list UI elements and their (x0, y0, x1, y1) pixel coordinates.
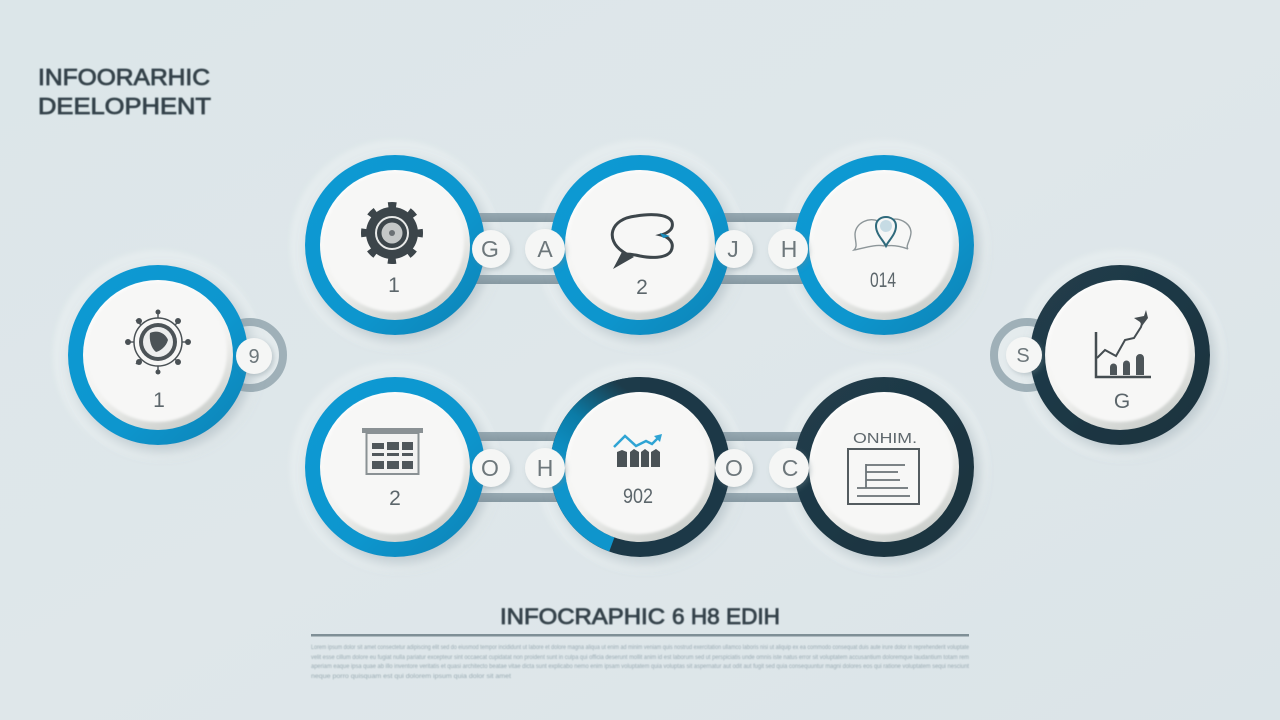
icon: bars with trend line (614, 434, 662, 467)
label: 2 (636, 276, 648, 299)
node: top 2 speech bubble (550, 155, 730, 335)
badge: H (525, 448, 565, 488)
footer heading: INFOCRAPHIC (500, 604, 665, 629)
connector: left ring (217, 322, 283, 388)
label: 2 (389, 487, 401, 510)
connector: bottom row left (475, 432, 565, 502)
footer body text: aperiam eaque ipsa quae ab illo inventore veritatis et quasi architecto beatae vitae dicta sunt explicabo nemo enim ipsam voluptatem quia voluptas sit aspernatur aut odit aut fugit sed quia consequuntur magni dolores eos qui ratione voluptatem sequi nesciunt (311, 663, 969, 670)
footer heading: 6 H8 EDIH (672, 604, 780, 629)
connector: bottom row right (720, 432, 805, 502)
icon: calendar (362, 428, 423, 474)
node: bottom 2 bar chart (550, 377, 730, 557)
badge: O: O (725, 455, 743, 481)
connector: right ring (994, 322, 1060, 388)
node: bottom 3 report (794, 377, 974, 557)
node: far left globe (68, 265, 248, 445)
footer body text (311, 644, 969, 680)
footer body text: velit esse cillum dolore eu fugiat nulla pariatur excepteur sint occaecat cupidatat non proident sunt in culpa qui officia deserunt mollit anim id est laborum sed ut perspiciatis unde omnis iste natus error sit voluptatem accusantium doloremque laudantium totam rem (311, 654, 969, 661)
label: 902 (623, 485, 653, 508)
badge: H: H (781, 236, 797, 262)
connector: top row right (720, 213, 805, 284)
connector: top row left (475, 213, 565, 284)
badge: H: H (537, 455, 553, 481)
title: INFOORARHIC (38, 64, 210, 90)
badge: H (768, 229, 808, 269)
icon: report window (848, 430, 919, 504)
footer heading (500, 604, 780, 629)
label: 014 (870, 269, 896, 292)
node: bottom 1 calendar (305, 377, 485, 557)
badge: J (715, 230, 753, 268)
icon: overlapping bubbles with pin (854, 217, 911, 250)
label: 1 (153, 389, 165, 412)
badge: C (769, 448, 809, 488)
node: top 3 hearts (794, 155, 974, 335)
badge: S: S (1016, 345, 1030, 367)
footer rule (311, 634, 969, 636)
badge: G: G (481, 236, 499, 262)
badge: O (472, 449, 510, 487)
footer body text: Lorem ipsum dolor sit amet consectetur adipiscing elit sed do eiusmod tempor incididunt ut labore et dolore magna aliqua ut enim ad minim veniam quis nostrud exercitation ullamco laboris nisi ut aliquip ex ea commodo consequat duis aute irure dolor in reprehenderit voluptate (311, 644, 969, 651)
icon: globe wheel (125, 310, 191, 374)
node: top 1 gear (305, 155, 485, 335)
badge: 9: 9 (248, 346, 260, 368)
badge: C: C (782, 455, 798, 481)
badge: A (525, 229, 565, 269)
badge: 9 (236, 338, 272, 374)
footer body text: neque porro quisquam est qui dolorem ipsum quia dolor sit amet (311, 673, 511, 680)
node: far right growth chart (1030, 265, 1210, 445)
badge: O (715, 449, 753, 487)
badge: S (1006, 337, 1042, 373)
icon: report window: ONHIM. (853, 430, 917, 447)
icon: gear (364, 206, 420, 260)
label: G (1114, 390, 1130, 413)
badge: O: O (481, 455, 499, 481)
badge: G (472, 230, 510, 268)
title: DEELOPHENT (38, 93, 211, 119)
badge: J: J (727, 236, 739, 262)
label: 1 (388, 274, 400, 297)
icon: growth chart (1096, 310, 1151, 377)
badge: A: A (537, 236, 553, 262)
title (38, 64, 211, 119)
icon: speech bubble (612, 215, 672, 269)
